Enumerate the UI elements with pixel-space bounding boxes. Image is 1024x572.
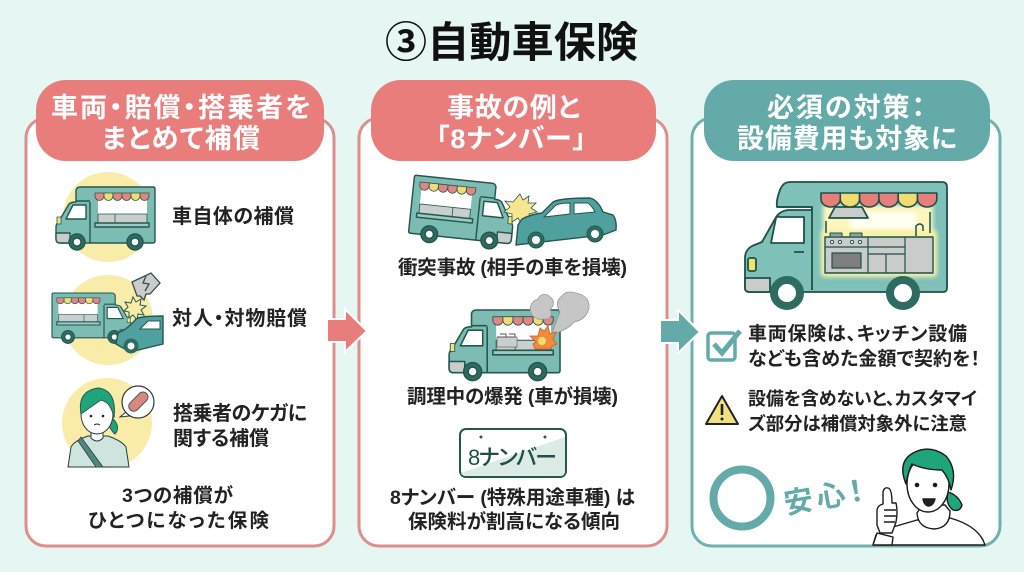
icon: truck colliding with car [408, 175, 616, 251]
text: collision caption: 衝突事故 (相手の車を損壊) [398, 257, 627, 279]
heading: panel 1 [36, 80, 324, 161]
icon: checkbox [708, 331, 740, 360]
icon: number 8 licence plate [460, 429, 566, 477]
title: ③自動車保険 [385, 19, 638, 66]
heading: panel 2 [371, 80, 656, 161]
arrow: panel 2 to panel 3 [660, 310, 700, 353]
text: explosion caption: 調理中の爆発 (車が損壊) [407, 385, 618, 408]
icon: warning triangle [706, 396, 738, 424]
panel: vehicle, liability and passenger coverage [26, 80, 334, 546]
text: panel 1 summary: 3つの補償が [122, 484, 234, 507]
icon: food truck with kitchen equipment [745, 182, 947, 306]
icon: number 8 licence plate: 8ナンバー [468, 445, 557, 470]
icon: food truck on yellow circle [56, 172, 155, 262]
panel: accident examples [359, 80, 667, 546]
icon: truck with fire and smoke [449, 292, 589, 381]
text: liability: 対人・対物賠償 [172, 307, 307, 330]
heading: panel 2: 事故の例と [447, 93, 580, 123]
panel: required measures: なども含めた金額で契約を！ [748, 348, 980, 370]
heading: panel 1: まとめて補償 [102, 124, 260, 154]
panel: required measures: ズ部分は補償対象外に注意 [748, 413, 967, 434]
icon: teal circle mark [714, 470, 770, 526]
panel: vehicle, liability and passenger coverage: ひとつになった保険 [88, 510, 269, 532]
arrow: panel 1 to panel 2 [327, 309, 367, 352]
icon: injured passenger with bandage bubble [62, 378, 154, 468]
text: number 8 explanation: 8ナンバー (特殊用途車種) は [390, 487, 635, 509]
icon: truck and car collision with cracked speech bubble [52, 273, 163, 365]
text: peace of mind: 安心！ [781, 475, 866, 521]
heading: panel 3: 必須の対策： [767, 93, 925, 123]
panel: vehicle, liability and passenger coverage: 関する補償 [173, 427, 269, 450]
text: passenger injury coverage: 搭乗者のケガに [173, 402, 307, 425]
text: vehicle coverage: 車自体の補償 [172, 205, 294, 228]
panel: required measures [692, 80, 1000, 546]
heading: panel 3: 設備費用も対象に [737, 124, 957, 154]
text: insure with equipment included: 車両保険は、キッチン設備 [748, 323, 967, 345]
text: customisation warning: 設備を含めないと、カスタマイ [748, 389, 977, 409]
heading: panel 2: 「8ナンバー」 [436, 124, 586, 154]
heading: panel 3 [704, 80, 990, 161]
panel: accident examples: 保険料が割高になる傾向 [408, 510, 620, 533]
heading: panel 1: 車両・賠償・搭乗者を [51, 93, 311, 123]
illustration: woman giving thumbs up [873, 449, 985, 545]
